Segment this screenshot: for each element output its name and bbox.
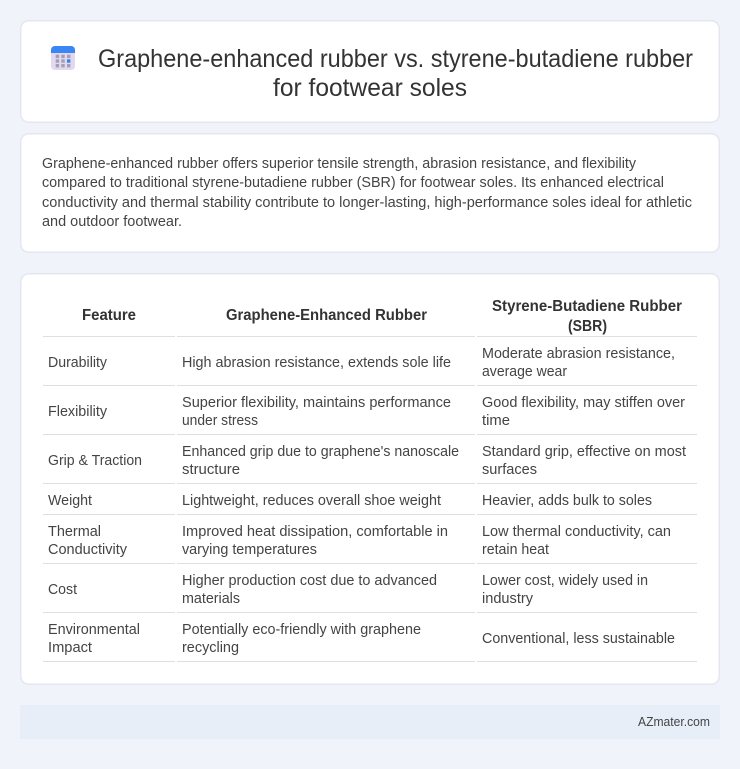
- row: thermal conductivity: Low thermal conductivity, can: [482, 524, 671, 540]
- row: grip and traction: Grip & Traction: [48, 453, 142, 469]
- table header: Graphene-Enhanced Rubber: [226, 307, 427, 324]
- row: durability: Moderate abrasion resistance,: [482, 346, 675, 362]
- row: environmental impact: Impact: [48, 640, 92, 656]
- panel: title card: [21, 21, 719, 122]
- row: thermal conductivity: Conductivity: [48, 542, 128, 558]
- panel: comparison table: [21, 274, 719, 684]
- row: weight: Weight: [48, 493, 92, 509]
- title: [98, 45, 693, 102]
- row: grip and traction: [48, 444, 686, 478]
- row: flexibility: Good flexibility, may stiffen over: [482, 395, 685, 411]
- row: thermal conductivity: retain heat: [482, 542, 549, 558]
- table header: Feature: [82, 307, 136, 324]
- intro paragraph: Graphene-enhanced rubber offers superior tensile strength, abrasion resistance, and flexibility: [42, 156, 637, 172]
- row: flexibility: under stress: [182, 413, 258, 429]
- title: Graphene-enhanced rubber vs. styrene-butadiene rubber: [98, 45, 693, 73]
- icon: calendar grid: [51, 46, 75, 70]
- row: flexibility: [48, 395, 685, 429]
- row: cost: industry: [482, 591, 534, 607]
- row: cost: [48, 573, 648, 607]
- row: durability: High abrasion resistance, extends sole life: [182, 355, 451, 371]
- row: grip and traction: Standard grip, effective on most: [482, 444, 686, 460]
- row: grip and traction: surfaces: [482, 462, 537, 478]
- row: environmental impact: Potentially eco-friendly with graphene: [182, 622, 421, 638]
- intro paragraph: and outdoor footwear.: [42, 214, 182, 230]
- table header: [82, 298, 682, 335]
- row: thermal conductivity: Improved heat dissipation, comfortable in: [182, 524, 448, 540]
- row: flexibility: time: [482, 413, 510, 429]
- row: thermal conductivity: Thermal: [48, 524, 101, 540]
- row: cost: Higher production cost due to advanced: [182, 573, 437, 589]
- row: durability: Durability: [48, 355, 108, 371]
- row: cost: Cost: [48, 582, 77, 598]
- row: thermal conductivity: varying temperatures: [182, 542, 317, 558]
- intro paragraph: conductivity and thermal stability contribute to longer-lasting, high-performance soles ideal for athletic: [42, 195, 692, 211]
- footer bar: [20, 705, 720, 739]
- row: environmental impact: [48, 622, 675, 656]
- row: cost: materials: [182, 591, 240, 607]
- row: grip and traction: structure: [182, 462, 240, 478]
- footer bar: AZmater.com: [638, 715, 710, 729]
- row: durability: [48, 346, 675, 380]
- row: thermal conductivity: [48, 524, 671, 558]
- intro paragraph: [42, 156, 692, 230]
- row: flexibility: Superior flexibility, maintains performance: [182, 395, 451, 411]
- table header: Styrene-Butadiene Rubber: [492, 298, 682, 315]
- row: flexibility: Flexibility: [48, 404, 108, 420]
- row: durability: average wear: [482, 364, 567, 380]
- title: for footwear soles: [273, 74, 467, 102]
- intro paragraph: compared to traditional styrene-butadiene rubber (SBR) for footwear soles. Its enhanced electrical: [42, 175, 664, 191]
- row: weight: Heavier, adds bulk to soles: [482, 493, 652, 509]
- table header: (SBR): [568, 318, 607, 335]
- row: cost: Lower cost, widely used in: [482, 573, 648, 589]
- panel: intro text: [21, 134, 719, 252]
- row: weight: Lightweight, reduces overall shoe weight: [182, 493, 441, 509]
- row: environmental impact: Conventional, less sustainable: [482, 631, 675, 647]
- row: weight: [48, 493, 652, 509]
- row: grip and traction: Enhanced grip due to graphene's nanoscale: [182, 444, 459, 460]
- row: environmental impact: Environmental: [48, 622, 140, 638]
- row: environmental impact: recycling: [182, 640, 239, 656]
